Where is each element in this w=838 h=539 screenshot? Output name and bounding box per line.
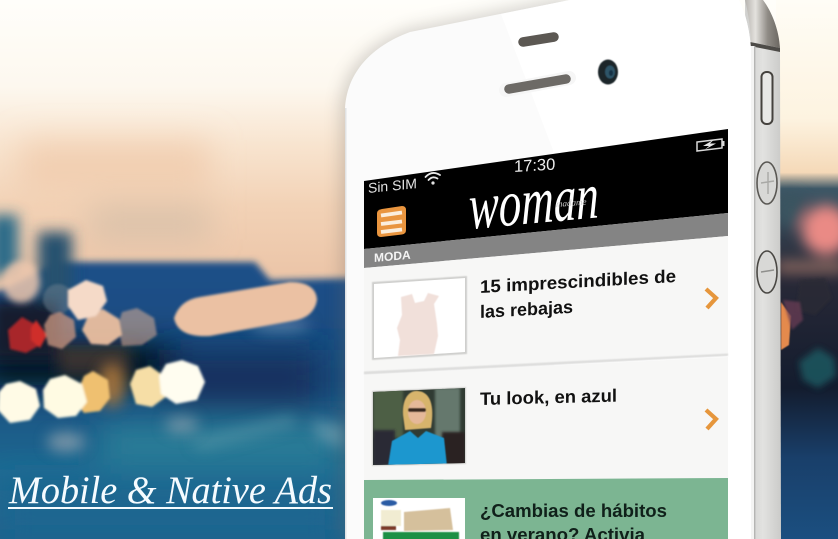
article row 1 (364, 236, 728, 374)
status bar: 17:30 (514, 156, 555, 176)
app header bar (364, 129, 728, 249)
thumbnail: Activia yogurt (373, 498, 465, 539)
sponsored article row (364, 478, 728, 539)
section bar: MODA: MODA (374, 248, 411, 265)
status bar (368, 139, 724, 196)
sponsored headline (480, 501, 667, 539)
woman magazine logo: madame (556, 197, 586, 209)
sponsored headline: ¿Cambias de hábitos (480, 501, 667, 521)
camera lens (598, 60, 618, 84)
volume down button (757, 251, 777, 293)
earpiece grille (506, 78, 569, 90)
article 1 headline (481, 270, 676, 318)
article 1 headline: las rebajas (480, 297, 573, 322)
thumbnail: dress (372, 276, 467, 360)
metal side of phone (745, 0, 781, 539)
article 2 headline: Tu look, en azul (480, 386, 617, 409)
phone (345, 0, 781, 539)
phone shadow (340, 0, 570, 539)
bokeh lights (0, 261, 317, 452)
status bar: Sin SIM (368, 175, 417, 196)
article 1 headline: 15 imprescindibles de (480, 266, 676, 297)
phone front (345, 0, 751, 539)
mute switch (762, 72, 772, 124)
section bar: MODA (364, 213, 728, 268)
right edge background (780, 70, 838, 539)
woman magazine logo (470, 186, 598, 229)
wifi icon (426, 173, 440, 184)
title: Mobile & Native Ads: Mobile & Native Ads (8, 469, 332, 512)
hamburger menu icon (377, 206, 406, 237)
volume up button (757, 162, 777, 204)
battery icon (697, 139, 724, 151)
thumbnail: woman in blue shirt (372, 387, 466, 466)
speaker slit (523, 37, 554, 42)
article row 2 (364, 357, 728, 480)
chevron arrow (706, 289, 716, 308)
chevron arrow (706, 410, 716, 429)
blue lower scene (0, 262, 360, 539)
woman magazine logo: woman (468, 158, 599, 243)
app screen (364, 129, 728, 539)
